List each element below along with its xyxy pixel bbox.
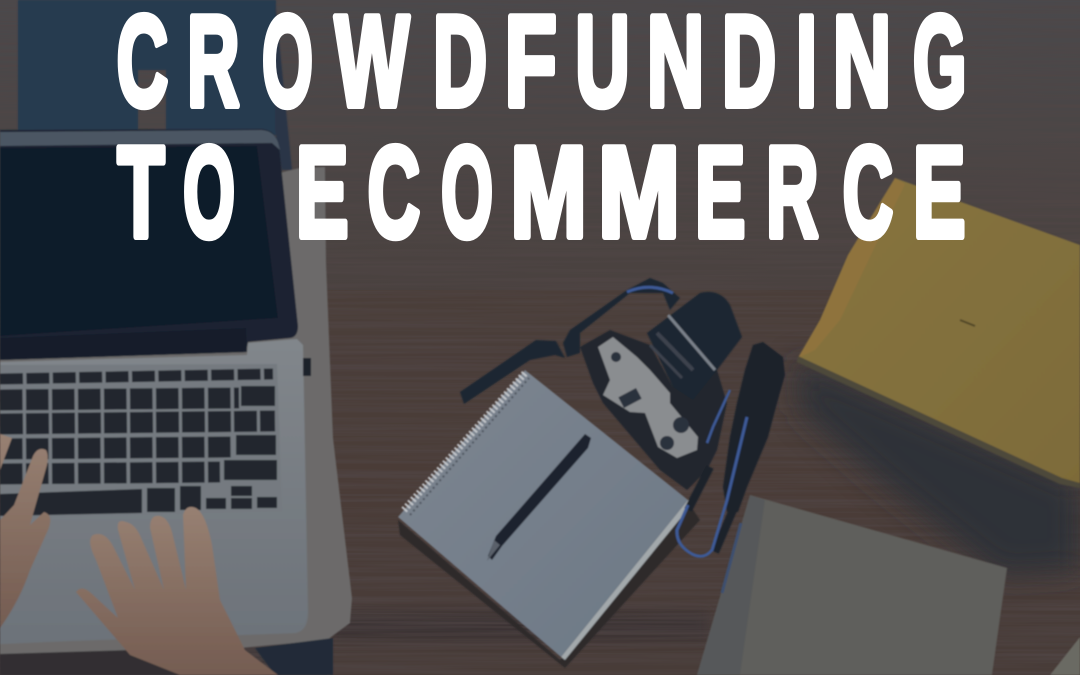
yellow parcel shadow — [797, 360, 1080, 575]
cardboard parcel — [697, 495, 1080, 675]
jeans at top left — [18, 0, 292, 170]
camera dark backing — [580, 330, 727, 490]
title line 2: T — [118, 120, 164, 264]
hand: left — [0, 434, 50, 628]
laptop lid and screen — [0, 129, 298, 360]
bottom left dark fabric — [0, 647, 270, 675]
laptop body — [0, 339, 308, 644]
title line 2: C — [368, 120, 420, 264]
notebook spiral — [404, 373, 525, 510]
camera strap right — [677, 342, 785, 556]
title line 2: M — [510, 120, 587, 264]
title line 2: O — [441, 120, 493, 264]
cushion under laptop — [0, 167, 352, 655]
small side port — [303, 358, 311, 376]
title line 2: O — [183, 120, 235, 264]
camera strap left — [460, 278, 680, 404]
title line 2: E — [296, 120, 348, 264]
title line 2: R — [766, 120, 818, 264]
notebook — [398, 370, 693, 660]
camera silver top plate — [598, 337, 698, 458]
title line 2: M — [598, 120, 680, 264]
hand: right — [76, 507, 278, 675]
keys — [0, 374, 275, 474]
yellow parcel — [797, 178, 1080, 488]
jeans bottom right of laptop — [255, 638, 333, 675]
title line 2: C — [843, 120, 893, 264]
title — [117, 0, 966, 264]
camera — [580, 292, 742, 490]
pen — [487, 434, 591, 561]
title line 2: E — [695, 120, 745, 264]
title line 2: E — [913, 120, 966, 264]
keyboard well — [0, 364, 282, 518]
camera lens — [647, 292, 742, 400]
notebook shadow — [398, 505, 700, 668]
